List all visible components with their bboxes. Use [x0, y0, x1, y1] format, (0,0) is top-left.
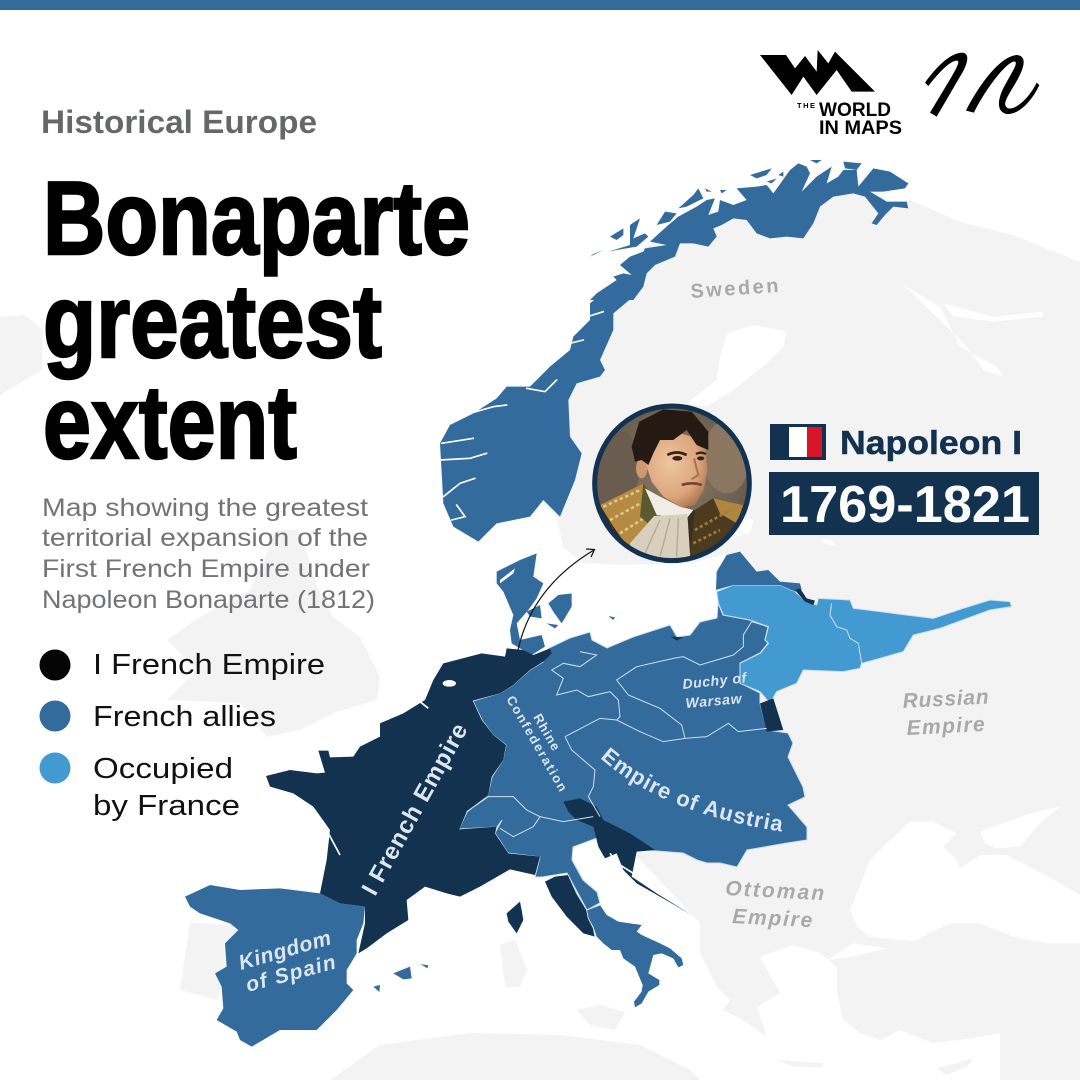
- label: Ottoman Empire: [725, 877, 825, 932]
- legend item: French allies: [40, 700, 276, 733]
- label: Ottoman Empire: Ottoman: [725, 877, 825, 905]
- title: Bonaparte greatest extent: Bonaparte: [43, 161, 470, 277]
- region: central European allies: [459, 603, 807, 910]
- region borders: Switzerland and north Italy: [467, 797, 593, 837]
- label: Duchy of Warsaw: Duchy of: [682, 669, 748, 692]
- dates badge: 1769-1821: [780, 476, 1030, 534]
- title: Bonaparte greatest extent: [43, 161, 470, 481]
- subtitle: Historical Europe: Historical Europe: [41, 104, 317, 140]
- label: Russian Empire: Russian: [902, 686, 989, 713]
- region: Norway south: [440, 280, 643, 542]
- legend item: Occupied by France: by France: [93, 790, 240, 822]
- legend item: Occupied by France: [40, 752, 240, 822]
- label: Russian Empire: [902, 686, 989, 740]
- region: Denmark: [497, 553, 615, 655]
- name: Napoleon I: Napoleon I: [840, 424, 1022, 461]
- icon: French flag: [770, 424, 826, 460]
- logo: The World in Maps: IN MAPS: [819, 118, 902, 139]
- region: Norway north: [590, 160, 908, 300]
- region: Kingdom of Naples and Tuscany: [545, 875, 683, 1007]
- description text: Napoleon Bonaparte (1812): [42, 586, 375, 614]
- description text: First French Empire under: [42, 555, 370, 583]
- label: Sweden: Sweden: [690, 275, 779, 303]
- description text: territorial expansion of the: [42, 524, 368, 552]
- top bar: [0, 0, 1080, 10]
- label: Rhine Confederation: Rhine: [530, 711, 563, 753]
- region: I French Empire: [266, 648, 692, 953]
- region: Kingdom of Spain: [185, 885, 428, 1047]
- label: Duchy of Warsaw: [682, 669, 748, 711]
- title: Bonaparte greatest extent: extent: [43, 365, 297, 481]
- logo: The World in Maps: [760, 50, 902, 139]
- legend item: Occupied by France: Occupied: [93, 753, 233, 785]
- label: Empire of Austria: Empire of Austria: [601, 747, 782, 832]
- logo: The World in Maps: WORLD: [819, 100, 891, 121]
- legend: [40, 649, 325, 822]
- portrait: Napoleon: [592, 404, 752, 564]
- region: occupied by France: [552, 552, 1012, 817]
- label: Kingdom of Spain: of Spain: [243, 951, 338, 997]
- logo: script m: [925, 53, 1039, 117]
- label: Kingdom of Spain: Kingdom: [236, 927, 334, 975]
- description text: Map showing the greatest: [42, 494, 368, 522]
- label: Ottoman Empire: Empire: [732, 905, 813, 932]
- label: Kingdom of Spain: [236, 927, 338, 997]
- label: I French Empire: I French Empire: [357, 719, 473, 900]
- title: Bonaparte greatest extent: greatest: [43, 264, 382, 380]
- logo: The World in Maps: THE: [797, 101, 815, 110]
- seas cut into land: [545, 285, 1080, 1075]
- label: Russian Empire: Empire: [906, 713, 985, 740]
- arrow: to portrait: [518, 549, 594, 650]
- label: Duchy of Warsaw: Warsaw: [685, 690, 743, 711]
- legend item: French allies: French allies: [93, 701, 276, 733]
- map of territories: [185, 160, 1012, 1047]
- description text: [42, 494, 375, 614]
- label: Rhine Confederation: Confederation: [503, 693, 570, 794]
- legend item: I French Empire: I French Empire: [93, 649, 325, 681]
